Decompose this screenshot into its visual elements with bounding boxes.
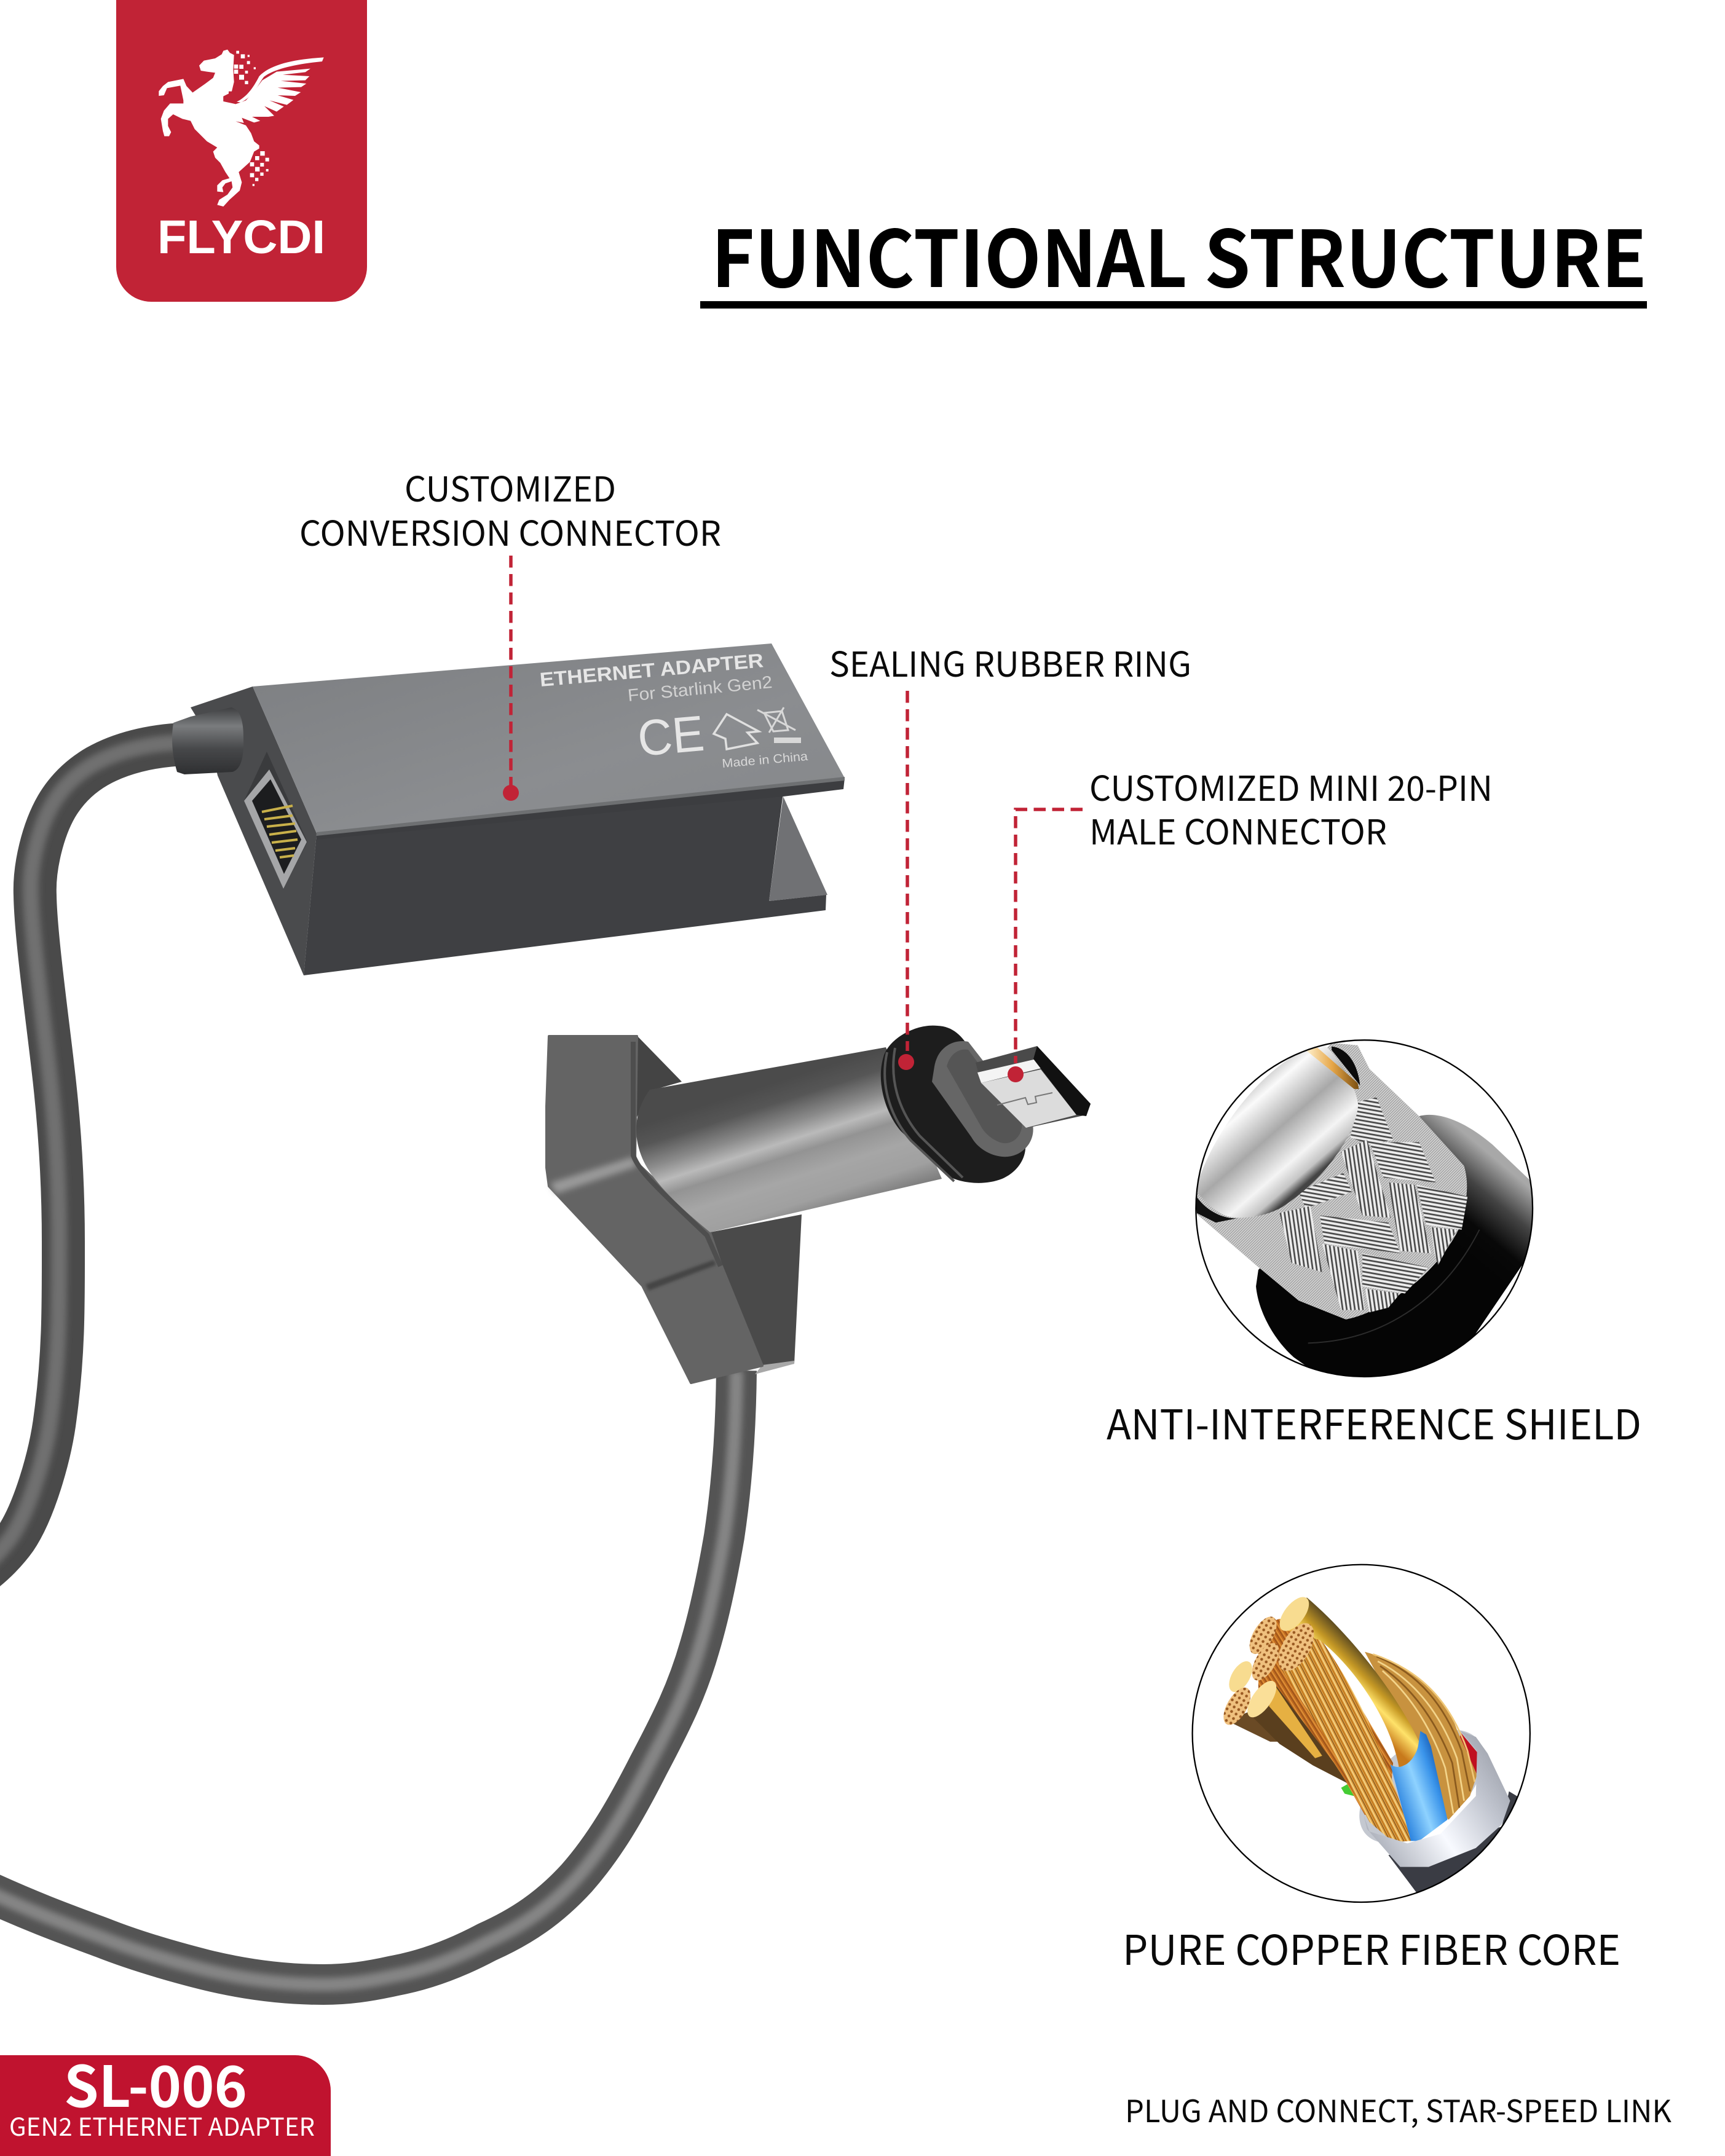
- icon: crossed bin mark: [757, 707, 801, 743]
- connector boss: [932, 1041, 1033, 1157]
- callout: mini 20-pin male connector: [1008, 761, 1493, 1082]
- black inner opening: [1332, 1047, 1360, 1085]
- arc strand: [1365, 1652, 1477, 1820]
- logo wordmark: FLYCDI: [157, 211, 325, 264]
- black outer sleeve: [1256, 1115, 1540, 1386]
- detail circle: copper core: [1193, 1565, 1530, 1902]
- adapter left side face: [191, 687, 317, 975]
- adapter front face: [304, 793, 826, 975]
- micro plug: [976, 1046, 1091, 1128]
- callout: sealing rubber ring: SEALING RUBBER RING: [829, 637, 1191, 687]
- main copper strand: [1280, 1626, 1411, 1842]
- cable boot: [172, 707, 243, 774]
- green wire: [1341, 1784, 1354, 1796]
- red wire: [1460, 1733, 1477, 1774]
- product print: Made in China: [722, 750, 809, 771]
- rear copper bundles: [1258, 1619, 1393, 1815]
- connector right facet: [710, 1214, 802, 1367]
- circle outline: [1196, 1040, 1533, 1377]
- lower solid wire: [1253, 1683, 1347, 1783]
- adapter housing: [172, 643, 845, 975]
- adapter inner slot panel: [769, 797, 827, 901]
- solid gold wire: [1287, 1597, 1419, 1768]
- herringbone strips: [1280, 1097, 1467, 1312]
- icon: house mark: [714, 714, 759, 749]
- callout: customized conversion connector: [299, 462, 721, 801]
- product print: [539, 649, 809, 771]
- ring rear: [1359, 1729, 1480, 1842]
- detail circle: braided shield: [1196, 1040, 1540, 1386]
- model badge: GEN2 ETHERNET ADAPTER: [9, 2107, 315, 2143]
- callout: mini 20-pin male connector: MALE CONNECTOR: [1089, 805, 1387, 855]
- label: pure copper fiber core: PURE COPPER FIBER CORE: [1123, 1918, 1620, 1977]
- silver conductor: [1196, 1045, 1358, 1218]
- adapter top face: [253, 643, 845, 833]
- sealing rubber ring: [881, 1026, 1025, 1183]
- silver ferrule front band: [1364, 1731, 1510, 1867]
- product print: For Starlink Gen2: [627, 672, 773, 705]
- connector back fin: [633, 1036, 682, 1125]
- cable: lower run to connector: [0, 1371, 736, 1985]
- braid cone: [1196, 1043, 1467, 1320]
- connector barrel: [636, 1047, 942, 1232]
- callout: customized conversion connector: CONVERSION CONNECTOR: [299, 506, 721, 556]
- connector main plate: [547, 1036, 762, 1383]
- mini connector assembly: [547, 1026, 1091, 1383]
- wire end caps: [1218, 1592, 1321, 1729]
- tagline: PLUG AND CONNECT, STAR-SPEED LINK: [1125, 2087, 1672, 2131]
- ethernet port: [244, 752, 307, 889]
- title: FUNCTIONAL STRUCTURE: [711, 197, 1647, 310]
- callout: mini 20-pin male connector: CUSTOMIZED MINI 20-PIN: [1089, 761, 1493, 811]
- product print: CE: [636, 706, 706, 767]
- gold core strip: [1306, 1048, 1359, 1089]
- callout: customized conversion connector: CUSTOMIZED: [405, 462, 616, 512]
- model badge: [0, 2042, 331, 2156]
- logo badge: [116, 0, 367, 302]
- circle outline: [1193, 1565, 1530, 1902]
- callout: sealing rubber ring: [829, 637, 1191, 1070]
- product print: ETHERNET ADAPTER: [539, 649, 764, 691]
- cable: left run from adapter: [0, 742, 184, 1573]
- rear cable jacket: [1388, 1792, 1521, 1893]
- label: anti-interference shield: ANTI-INTERFERENCE SHIELD: [1107, 1392, 1641, 1452]
- model badge: SL-006: [64, 2042, 247, 2123]
- icon: winged horse: [159, 50, 324, 207]
- blue sheath: [1391, 1731, 1448, 1841]
